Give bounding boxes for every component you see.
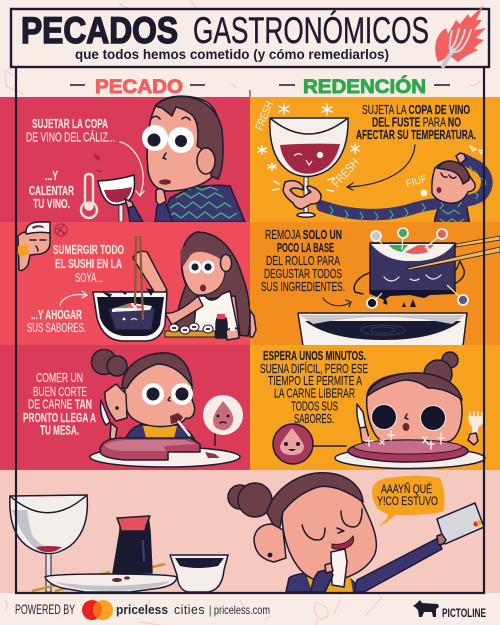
icon: chopsticks — [135, 236, 143, 320]
panel: row 1 redención — [250, 97, 500, 225]
icon: wine glass held by the stem — [270, 118, 348, 217]
text: sujetar la copa — [26, 116, 115, 144]
panel: final scene — [0, 470, 500, 593]
icon: chopsticks — [408, 236, 500, 270]
icon: credit card in hand — [437, 503, 484, 545]
text: sumergir todo el sushi: EL SUSHI EN LA — [55, 256, 122, 271]
text: comer un buen corte: DE CARNE TAN — [28, 396, 92, 412]
icon: flaming fork — [435, 5, 486, 66]
callout: speech bubble: Y!CO ESTUVO — [377, 494, 438, 508]
icon: steak on plate with a bite — [90, 438, 240, 467]
text: calentar tu vino: TU VINO. — [33, 196, 70, 211]
text: espera unos minutos: SABORES. — [294, 411, 334, 426]
icon: soy sauce bottle — [113, 516, 152, 573]
callout: happy meat — [273, 424, 346, 464]
subtitle: que todos hemos cometido (y cómo remediarlos) — [75, 46, 389, 62]
arrow — [60, 291, 87, 305]
icons: sparkles — [365, 431, 444, 449]
icon: sushi tray and soy bottle — [165, 314, 239, 340]
text: comer un buen corte: TU MESA. — [40, 422, 79, 438]
text: priceless cities: priceless — [116, 602, 168, 617]
arrow — [120, 142, 144, 196]
title: PECADOS — [21, 10, 178, 51]
text: fresh labels: FIUF — [405, 174, 428, 190]
icon: ball of scribble — [55, 224, 67, 236]
arrow — [323, 298, 351, 307]
icon: sushi roll dipped correctly — [354, 243, 464, 307]
text: espera unos minutos: LA CARNE LIBERAR — [274, 386, 355, 400]
logo: mastercard — [82, 600, 113, 620]
text: y ahogar sus sabores: SUS SABORES. — [27, 320, 86, 335]
text: calentar tu vino: CALENTAR — [29, 183, 74, 198]
icon: chopsticks on table — [32, 564, 165, 591]
text: priceless cities: | priceless.com — [209, 603, 270, 617]
text: sujeta la copa: DEL FUSTE PARA NO — [372, 114, 461, 130]
text: y ahogar sus sabores: ...Y AHOGAR — [31, 307, 82, 322]
text: remoja solo un poco: DEGUSTAR TODOS — [264, 266, 342, 281]
text: calentar tu vino — [29, 168, 74, 211]
text: fresh labels — [254, 100, 428, 190]
column headings — [70, 74, 450, 98]
text: priceless cities: cities — [174, 602, 205, 617]
text: sujetar la copa: SUJETAR LA COPA — [32, 116, 108, 131]
text: remoja solo un poco: SUS INGREDIENTES. — [261, 279, 345, 294]
text: sumergir todo el sushi: SUMERGIR TODO — [53, 242, 124, 257]
character: chef peeking — [18, 222, 50, 270]
callout: speech bubble — [372, 476, 444, 526]
text: comer un buen corte: BUEN CORTE — [33, 384, 87, 399]
text: y ahogar sus sabores — [27, 307, 86, 335]
text: espera unos minutos: TIEMPO LE PERMITE A — [268, 373, 362, 388]
heading: pecado — [70, 76, 205, 98]
icon: empty wine glass — [10, 495, 87, 592]
text: sumergir todo el sushi: SOYA... — [75, 270, 103, 285]
text: espera unos minutos: TODOS SUS — [291, 398, 338, 414]
text: fresh labels: FRESH — [254, 100, 276, 132]
panel: row 3 pecado — [0, 345, 250, 470]
icon: soy sauce bowl — [298, 313, 467, 346]
title box — [11, 9, 489, 67]
icons: stars — [258, 104, 359, 191]
callout: sad drop — [203, 395, 243, 446]
text: priceless cities — [116, 602, 270, 617]
icon: wine glass held by the bowl — [94, 153, 143, 222]
text: espera unos minutos — [260, 348, 368, 426]
icon: soy bowl with sushi — [93, 288, 167, 341]
icon: fork — [178, 421, 190, 436]
text: sujeta la copa: SUJETA LA COPA DE VINO — [362, 102, 470, 117]
text: espera unos minutos: ESPERA UNOS MINUTOS. — [263, 348, 366, 363]
text: espera unos minutos: SUENA DIFÍCIL, PERO ESE — [260, 361, 368, 376]
logo: pictoline bull — [413, 600, 439, 617]
callouts: ingredient markers — [367, 228, 468, 308]
icon: dirty plate — [45, 574, 177, 592]
icon: fork — [468, 411, 483, 445]
text: fresh labels: FRESH — [329, 155, 362, 190]
text: sumergir todo el sushi — [53, 242, 124, 285]
text: remoja solo un poco: POCO LA BASE — [277, 240, 334, 255]
heading: pecado: PECADO — [95, 76, 183, 98]
character: girl eating steak — [92, 350, 196, 443]
icon: soy sauce bowl — [170, 555, 228, 592]
text: calentar tu vino: ...Y — [45, 168, 58, 183]
panel: row 2 redención — [250, 222, 500, 346]
panel: row 2 pecado — [0, 222, 250, 345]
icon: knife — [357, 404, 370, 442]
frame lines — [16, 67, 484, 593]
text: sujeta la copa — [356, 102, 476, 142]
heading: redención: REDENCIÓN — [303, 74, 426, 98]
panel: row 3 redención — [250, 345, 500, 470]
icon: whole steak on plate — [335, 440, 485, 468]
text: sujetar la copa: DE VINO DEL CÁLIZ... — [26, 130, 115, 144]
character: woman with long hair — [133, 232, 250, 337]
text: comer un buen corte — [23, 370, 96, 438]
text: remoja solo un poco — [261, 227, 345, 294]
character: man with big eyes — [142, 96, 245, 222]
callout: speech bubble: AAAYÑ QUÉ — [381, 481, 432, 496]
icon: knife — [101, 400, 117, 441]
character: satisfied woman with card — [228, 473, 442, 592]
text: remoja solo un poco: DEL ROLLO PARA — [266, 253, 340, 268]
footer — [15, 600, 486, 620]
text: comer un buen corte: PRONTO LLEGA A — [23, 410, 96, 425]
character: girl waiting — [367, 352, 462, 442]
text: powered by: POWERED BY — [15, 601, 75, 617]
panel: row 1 pecado — [0, 96, 250, 222]
title — [21, 10, 429, 51]
text: remoja solo un poco: REMOJA SOLO UN — [265, 227, 342, 242]
arrow — [347, 145, 415, 190]
text: comer un buen corte: COMER UN — [36, 370, 83, 385]
character: small man with long arm — [322, 146, 487, 225]
icon: thermometer — [81, 174, 97, 218]
